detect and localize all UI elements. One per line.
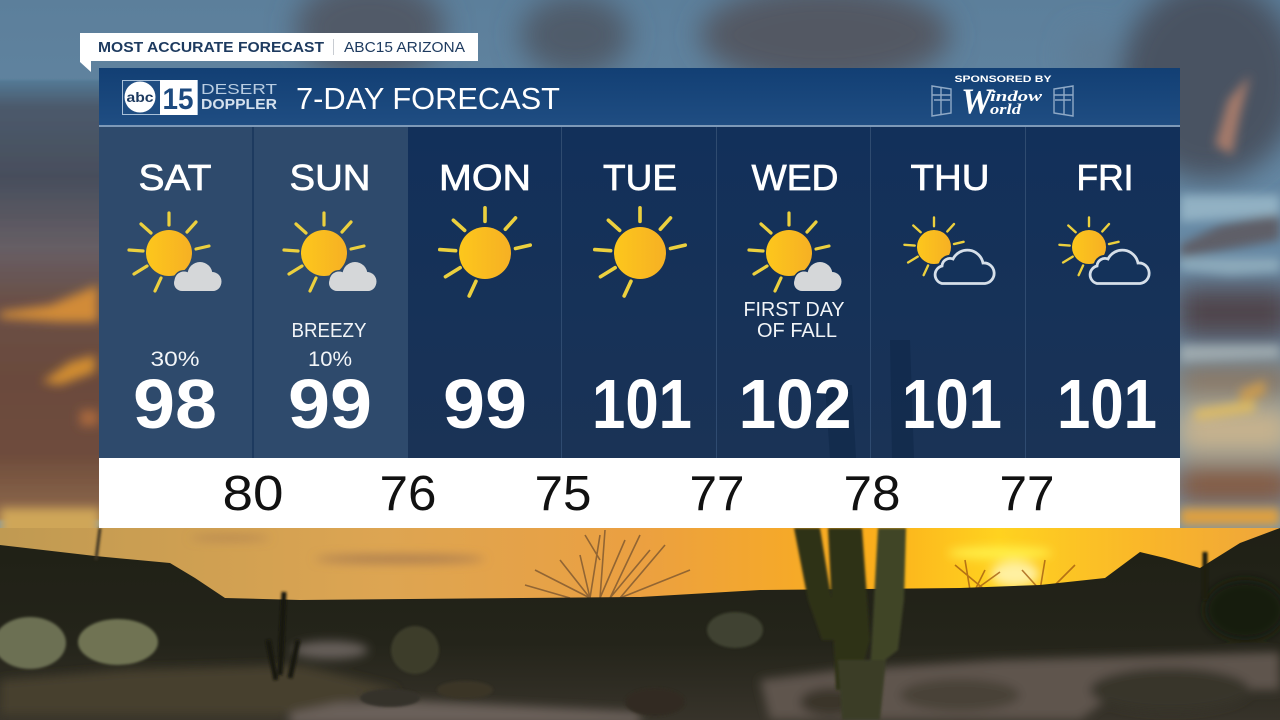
logo: abc15 desert doppler [122,80,278,116]
column: MON: 99 [443,365,527,443]
column: SUN [284,157,376,443]
heading: 7-DAY FORECAST [296,81,560,116]
logo: abc15 desert doppler: DESERT [201,81,277,98]
icon: small sun with outline cloud [1059,217,1149,284]
panel: overnight lows band: 80 [222,467,284,521]
column: SUN: SUN [290,157,370,198]
logo: abc15 desert doppler: 15 [162,83,194,116]
column: FRI: FRI [1076,157,1134,198]
icon: small sun with outline cloud [904,217,994,284]
icon: sun [595,208,685,296]
note: first day of fall [744,299,844,342]
column: SAT: 98 [133,365,217,443]
column: TUE: 101 [592,365,692,443]
column: SUN: BREEZY [292,320,366,342]
sunset horizon [0,528,1280,603]
column: TUE [592,157,692,443]
panel: overnight lows band: 75 [534,467,592,521]
panel: forecast columns background [99,127,1180,458]
column: SUN: 10% [308,348,352,371]
tag: most accurate forecast [80,33,478,72]
column: SAT [129,157,222,443]
column: MON [439,157,531,443]
note: first day of fall: OF FALL [757,320,837,342]
desert ground [0,528,1280,720]
panel: overnight lows band: 76 [380,467,436,521]
icon: sun with cloud [749,213,842,291]
icon: sun with cloud [284,213,376,291]
column: FRI: 101 [1057,365,1157,443]
column: THU: THU [910,157,990,198]
column: TUE: TUE [603,157,677,198]
column: SUN: 99 [288,365,372,443]
tag: most accurate forecast: ABC15 ARIZONA [344,40,465,56]
column: WED: WED [752,157,838,198]
panel: overnight lows band: 78 [844,467,900,521]
sponsor: window world [932,74,1073,121]
column: THU [902,157,1002,443]
column: THU: 101 [902,365,1002,443]
logo: abc15 desert doppler: DOPPLER [201,97,278,113]
icon: sun with cloud [129,213,222,291]
panel: overnight lows band: 77 [1000,467,1054,521]
column: FRI [1057,157,1157,443]
column: MON: MON [439,157,531,198]
tag: most accurate forecast: MOST ACCURATE FORECAST [98,40,324,56]
sponsor: window world: SPONSORED BY [954,74,1052,85]
logo: abc15 desert doppler: abc [126,89,154,105]
panel: overnight lows band: 77 [690,467,744,521]
saguaro cactus [794,528,906,720]
tree silhouettes on the horizon [525,530,1075,598]
panel: forecast header bar [99,68,1180,127]
column: WED: 102 [738,365,852,443]
note: first day of fall: FIRST DAY [744,299,844,321]
column: WED [738,157,852,443]
panel: overnight lows band [99,458,1180,528]
sponsor: window world: W [961,81,995,121]
icon: sun [440,208,530,296]
sponsor: window world: orld [990,102,1022,118]
column: SAT: SAT [138,157,212,198]
sponsor: window world: indow [990,89,1043,105]
column: SAT: 30% [150,348,200,371]
